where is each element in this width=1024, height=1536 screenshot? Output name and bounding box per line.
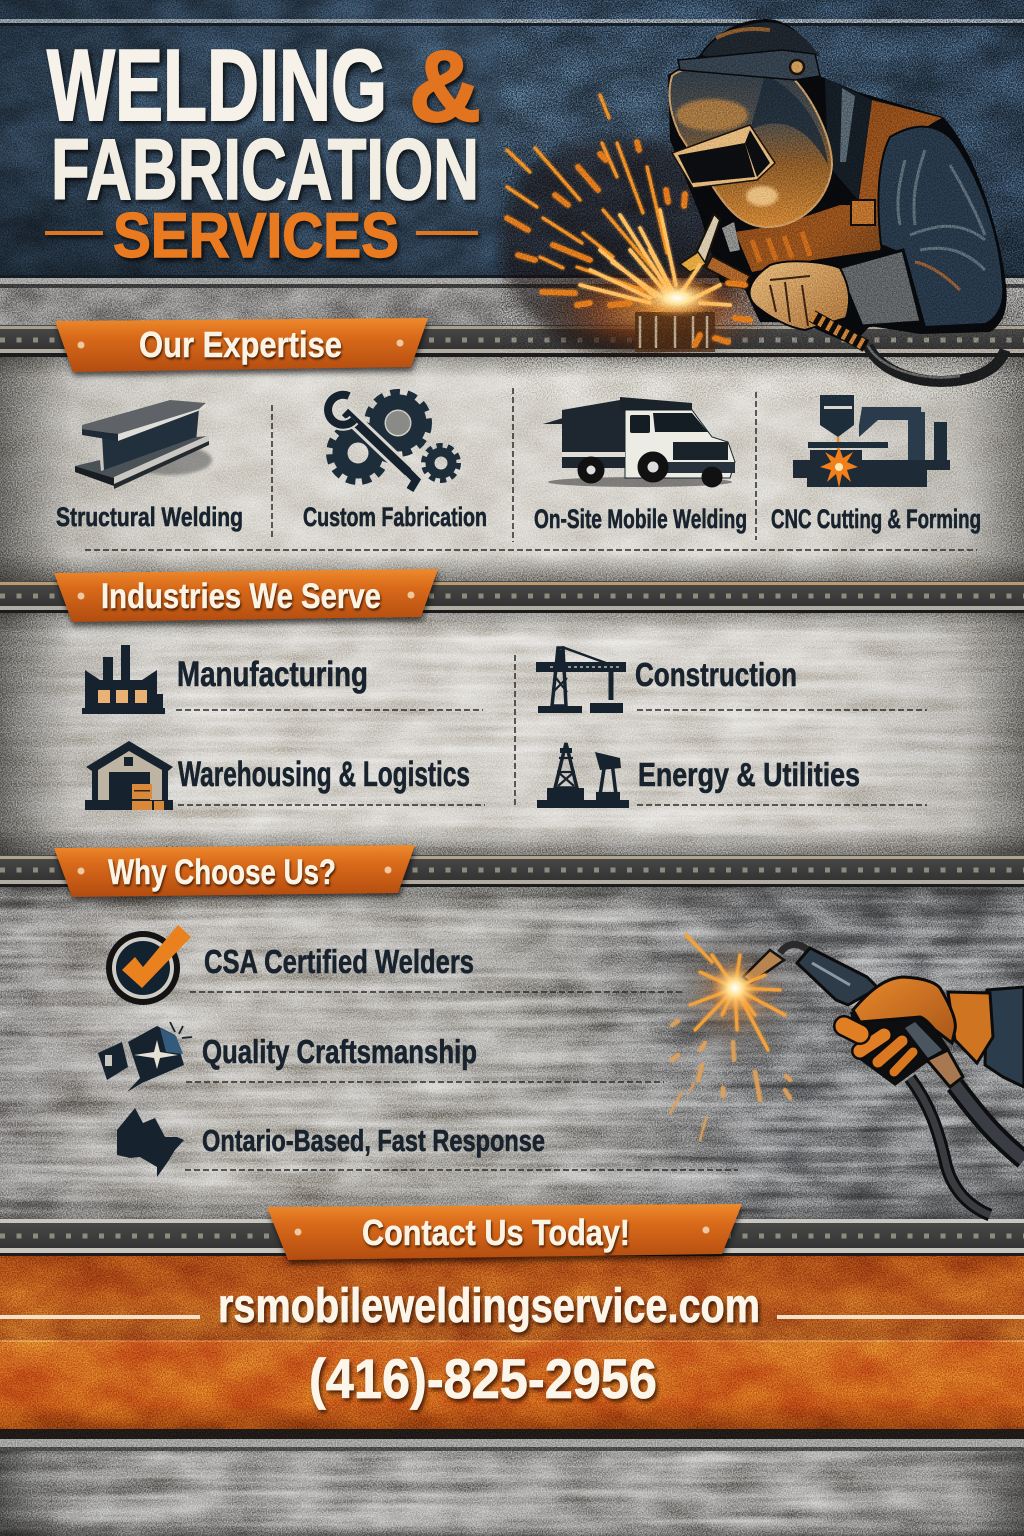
grip body bbox=[850, 1012, 950, 1086]
truck grille bbox=[673, 442, 728, 460]
icon: wrench and gears bbox=[328, 393, 458, 490]
shield glare bbox=[676, 99, 748, 131]
headband bbox=[678, 50, 820, 80]
label: csa certified welders: CSA Certified Welders bbox=[204, 943, 474, 980]
header top rail bbox=[0, 19, 1024, 288]
section banner: industries we serve bbox=[54, 569, 438, 622]
welder body silhouette bbox=[668, 19, 1007, 345]
label: on-site mobile welding: On-Site Mobile Welding bbox=[534, 504, 747, 534]
sparks bbox=[507, 95, 750, 345]
industries dividers bbox=[176, 655, 927, 808]
icon: factory bbox=[82, 645, 165, 714]
hose highlight bbox=[868, 346, 960, 377]
ribbed hose collar bbox=[812, 316, 866, 346]
background: industries plate bbox=[0, 610, 1024, 856]
why choose us dividers bbox=[185, 992, 738, 1170]
beam top flange front bbox=[82, 429, 118, 441]
weld seam on rail bbox=[635, 312, 715, 352]
beam web bbox=[98, 409, 199, 472]
riveted rail: contact bbox=[0, 1219, 1024, 1256]
contact phone: (416)-825-2956 bbox=[309, 1347, 657, 1410]
riveted rail: industries bbox=[0, 581, 1024, 613]
label: manufacturing: Manufacturing bbox=[177, 655, 368, 694]
background: footer steel plate bbox=[0, 1440, 1024, 1536]
gear small bbox=[424, 446, 458, 480]
section banner: why choose us bbox=[54, 845, 415, 897]
icon: crane bbox=[536, 647, 626, 713]
torch handle bbox=[797, 948, 878, 1005]
artwork grain overlay bbox=[500, 0, 1024, 400]
icon: service truck bbox=[543, 397, 735, 487]
face shield bbox=[670, 63, 832, 227]
title ampersand: & bbox=[409, 31, 481, 143]
wheels bbox=[578, 452, 722, 487]
truck bumper bbox=[666, 462, 735, 473]
visor glass bbox=[678, 143, 755, 183]
title word: welding: WELDING bbox=[47, 30, 387, 142]
side window bbox=[630, 415, 650, 433]
helmet highlight bbox=[716, 29, 770, 38]
beam top flange edge bbox=[118, 403, 206, 441]
base bbox=[793, 450, 950, 487]
copper collar bbox=[927, 1050, 963, 1087]
windshield bbox=[653, 413, 708, 432]
lower cable core bbox=[910, 1078, 990, 1215]
sleeve folds bbox=[898, 150, 985, 290]
expertise dividers bbox=[85, 388, 977, 550]
icon: oil derrick and pump bbox=[537, 743, 629, 808]
main cable core bbox=[955, 1085, 1024, 1160]
cut spark bbox=[820, 447, 858, 488]
beam lower flange top bbox=[75, 436, 209, 478]
collar bbox=[825, 78, 872, 200]
title word: services: SERVICES bbox=[113, 201, 399, 271]
wrench bbox=[328, 395, 416, 490]
illustration: gloved hand with mig torch bbox=[657, 917, 1024, 1215]
sleeve bbox=[878, 127, 1003, 327]
label: quality craftsmanship: Quality Craftsmanship bbox=[202, 1033, 477, 1070]
finger three bbox=[878, 1041, 902, 1062]
cnc column bbox=[934, 422, 947, 460]
beam lower flange edge bbox=[114, 435, 209, 484]
background: why choose us plate bbox=[0, 885, 1024, 1225]
apron and straps bbox=[735, 100, 942, 272]
section banner: why choose us: Why Choose Us? bbox=[108, 853, 336, 892]
contact website: rsmobileweldingservice.com bbox=[218, 1280, 760, 1333]
beam web edge bbox=[97, 436, 104, 472]
icon: i-beam bbox=[75, 400, 212, 489]
beam top flange bbox=[82, 400, 206, 434]
torch head bbox=[680, 214, 750, 288]
label: ontario-based fast response: Ontario-Based, Fast Response bbox=[202, 1123, 545, 1158]
visor side bbox=[745, 130, 770, 177]
label: energy and utilities: Energy & Utilities bbox=[638, 756, 860, 793]
section banner: contact us today: Contact Us Today! bbox=[362, 1212, 630, 1253]
strap buckle bbox=[851, 200, 875, 225]
title word: fabrication: FABRICATION bbox=[51, 122, 479, 218]
label: warehousing and logistics: Warehousing & Logistics bbox=[178, 755, 470, 794]
cnc gantry bbox=[859, 407, 925, 462]
background: header steel plate bbox=[0, 0, 1024, 327]
torch spark glow bbox=[657, 917, 813, 1073]
bed bbox=[808, 442, 888, 448]
torch nozzle bbox=[743, 950, 784, 983]
riveted rail: expertise bbox=[0, 325, 1024, 357]
cab bbox=[625, 410, 735, 478]
thumb and back of hand bbox=[853, 977, 955, 1043]
truck stripe bbox=[562, 452, 625, 457]
side flap bbox=[543, 418, 563, 424]
headband pivot bbox=[790, 60, 804, 74]
box body bbox=[562, 400, 626, 468]
apron stripes bbox=[752, 232, 810, 262]
section banner: our expertise: Our Expertise bbox=[139, 324, 342, 365]
shield lower glare bbox=[746, 186, 778, 206]
shield side shade bbox=[750, 75, 828, 165]
background: expertise plate bbox=[0, 355, 1024, 581]
handle highlight bbox=[812, 963, 850, 985]
label: construction: Construction bbox=[635, 656, 797, 693]
cut core bbox=[835, 463, 843, 471]
arc flash bbox=[635, 278, 719, 318]
laser beam bbox=[837, 437, 839, 462]
finger lines bbox=[770, 276, 810, 326]
section banner: contact us today bbox=[267, 1204, 742, 1260]
icon: certified check badge bbox=[106, 925, 191, 1005]
visor frame bbox=[672, 125, 775, 188]
spark glow bbox=[500, 135, 790, 362]
riveted rail: why choose us bbox=[0, 855, 1024, 887]
torch sparks bbox=[670, 935, 790, 1140]
section banner: industries we serve: Industries We Serve bbox=[101, 577, 381, 616]
title block bbox=[45, 30, 481, 271]
lower cable bbox=[910, 1078, 990, 1215]
nozzle bbox=[820, 395, 854, 437]
illustration: welder with torch and sparks bbox=[500, 19, 1007, 381]
finger one bbox=[844, 1026, 860, 1034]
helmet back cap bbox=[702, 22, 820, 60]
beam lower flange front bbox=[75, 466, 114, 486]
hose bbox=[868, 346, 1005, 381]
footer orange contact band bbox=[0, 1255, 1024, 1451]
title side rule right bbox=[416, 231, 478, 235]
sleeve bbox=[985, 987, 1024, 1087]
gear large top bbox=[368, 393, 428, 453]
contact rule left bbox=[0, 1315, 200, 1319]
torch gooseneck bbox=[780, 944, 808, 953]
finger two bbox=[860, 1035, 884, 1051]
truck roof bbox=[620, 397, 692, 411]
finger four bbox=[894, 1052, 913, 1072]
icon: ontario map bbox=[117, 1108, 184, 1177]
torch arc flash bbox=[711, 964, 759, 1012]
icon: warehouse bbox=[85, 741, 173, 810]
nozzle band bbox=[824, 406, 852, 409]
section banner: our expertise bbox=[55, 318, 428, 372]
collar highlight bbox=[840, 88, 855, 162]
grip highlight bbox=[905, 1022, 942, 1058]
label: structural welding: Structural Welding bbox=[56, 502, 243, 532]
icon: quality badge bbox=[98, 1022, 192, 1092]
contact rule right bbox=[777, 1315, 1024, 1319]
gloved hand bbox=[750, 261, 849, 330]
icon: cnc cutter bbox=[793, 395, 950, 488]
sleeve cuff bbox=[838, 250, 921, 326]
label: custom fabrication: Custom Fabrication bbox=[303, 502, 487, 532]
gear left bbox=[330, 425, 386, 481]
title side rule left bbox=[45, 231, 103, 235]
glove cuff bbox=[948, 992, 993, 1063]
main cable bbox=[955, 1085, 1024, 1160]
beam lower flange side bbox=[114, 441, 209, 489]
